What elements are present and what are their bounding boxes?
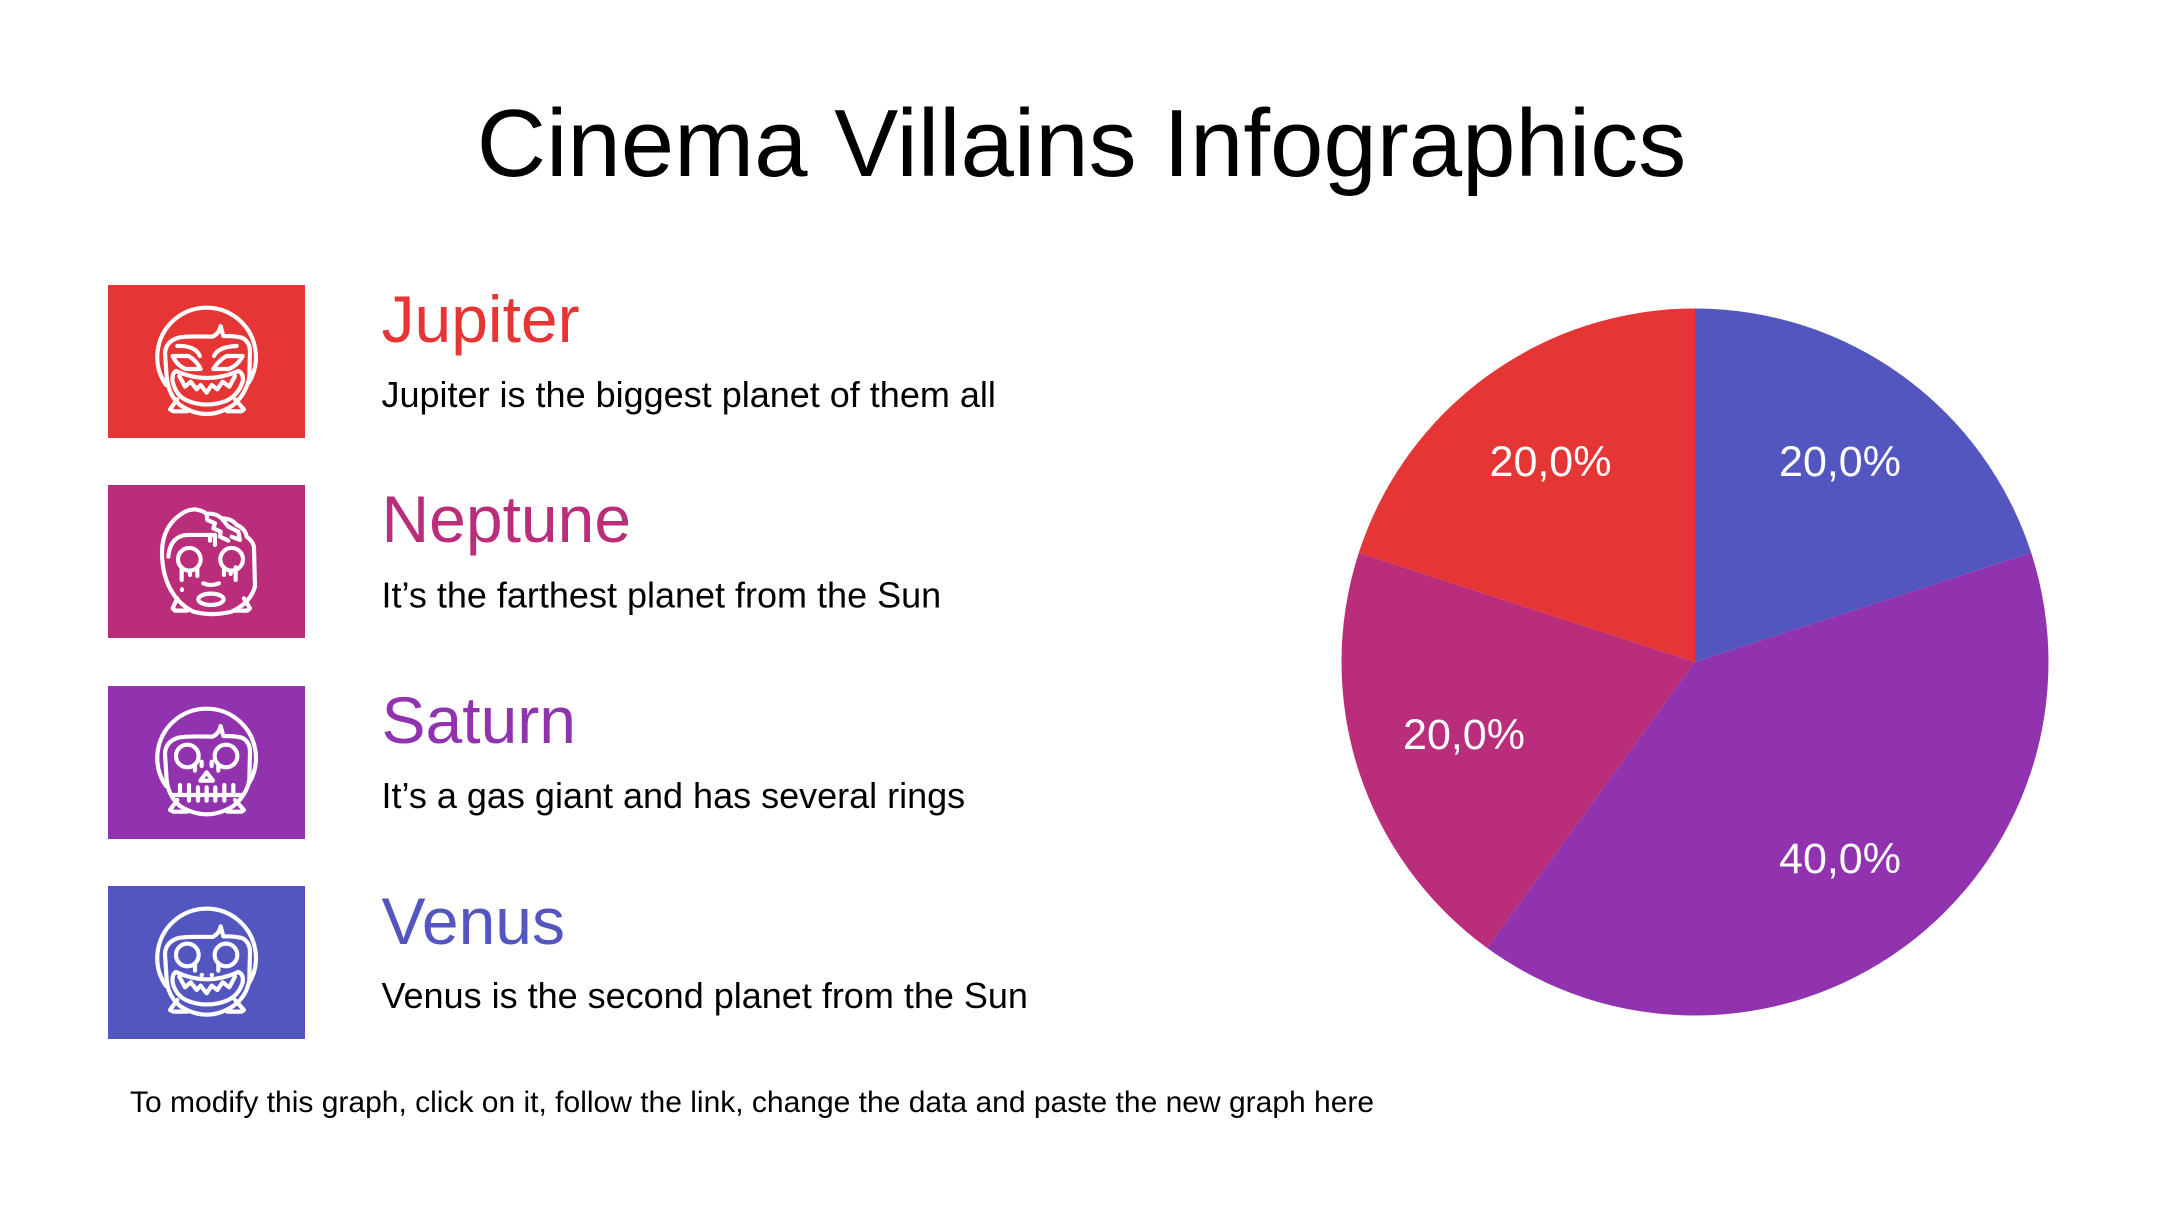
panel: Venus row: [108, 884, 1028, 1039]
text: Venus description: Venus is the second planet from the Sun: [382, 975, 1028, 1016]
text: Saturn description: It’s a gas giant and has several rings: [382, 775, 965, 816]
footer note: To modify this graph, click on it, follow the link, change the data and paste the new graph here: [130, 1086, 1374, 1119]
heading: Jupiter: Jupiter: [382, 282, 580, 356]
slice: blue 20%: [1695, 308, 2031, 662]
pie chart: [1342, 308, 2048, 1016]
heading: Saturn: Saturn: [382, 683, 576, 757]
heading: Venus: Venus: [382, 884, 565, 958]
slice: red 20%: [1359, 308, 1695, 662]
panel: Saturn row: [108, 683, 965, 839]
title: Cinema Villains Infographics: [477, 90, 1686, 197]
label: red slice value: 20,0%: [1490, 438, 1611, 486]
icon: purple skull villain: [108, 686, 305, 839]
panel: Jupiter row: [108, 282, 996, 438]
slice: purple 40%: [1487, 553, 2048, 1016]
panel: Neptune row: [108, 482, 941, 638]
icon: red shark-faced villain: [108, 285, 305, 438]
icon: blue grinning skull villain: [108, 886, 305, 1039]
text: Neptune description: It’s the farthest planet from the Sun: [382, 574, 941, 616]
icon: magenta zombie villain: [108, 485, 305, 638]
slice: magenta 20%: [1342, 553, 1695, 948]
label: purple slice value: 40,0%: [1779, 835, 1901, 883]
heading: Neptune: Neptune: [382, 482, 631, 556]
label: blue slice value: 20,0%: [1779, 438, 1901, 486]
label: magenta slice value: 20,0%: [1403, 711, 1525, 759]
text: Jupiter description: Jupiter is the biggest planet of them all: [382, 374, 996, 415]
